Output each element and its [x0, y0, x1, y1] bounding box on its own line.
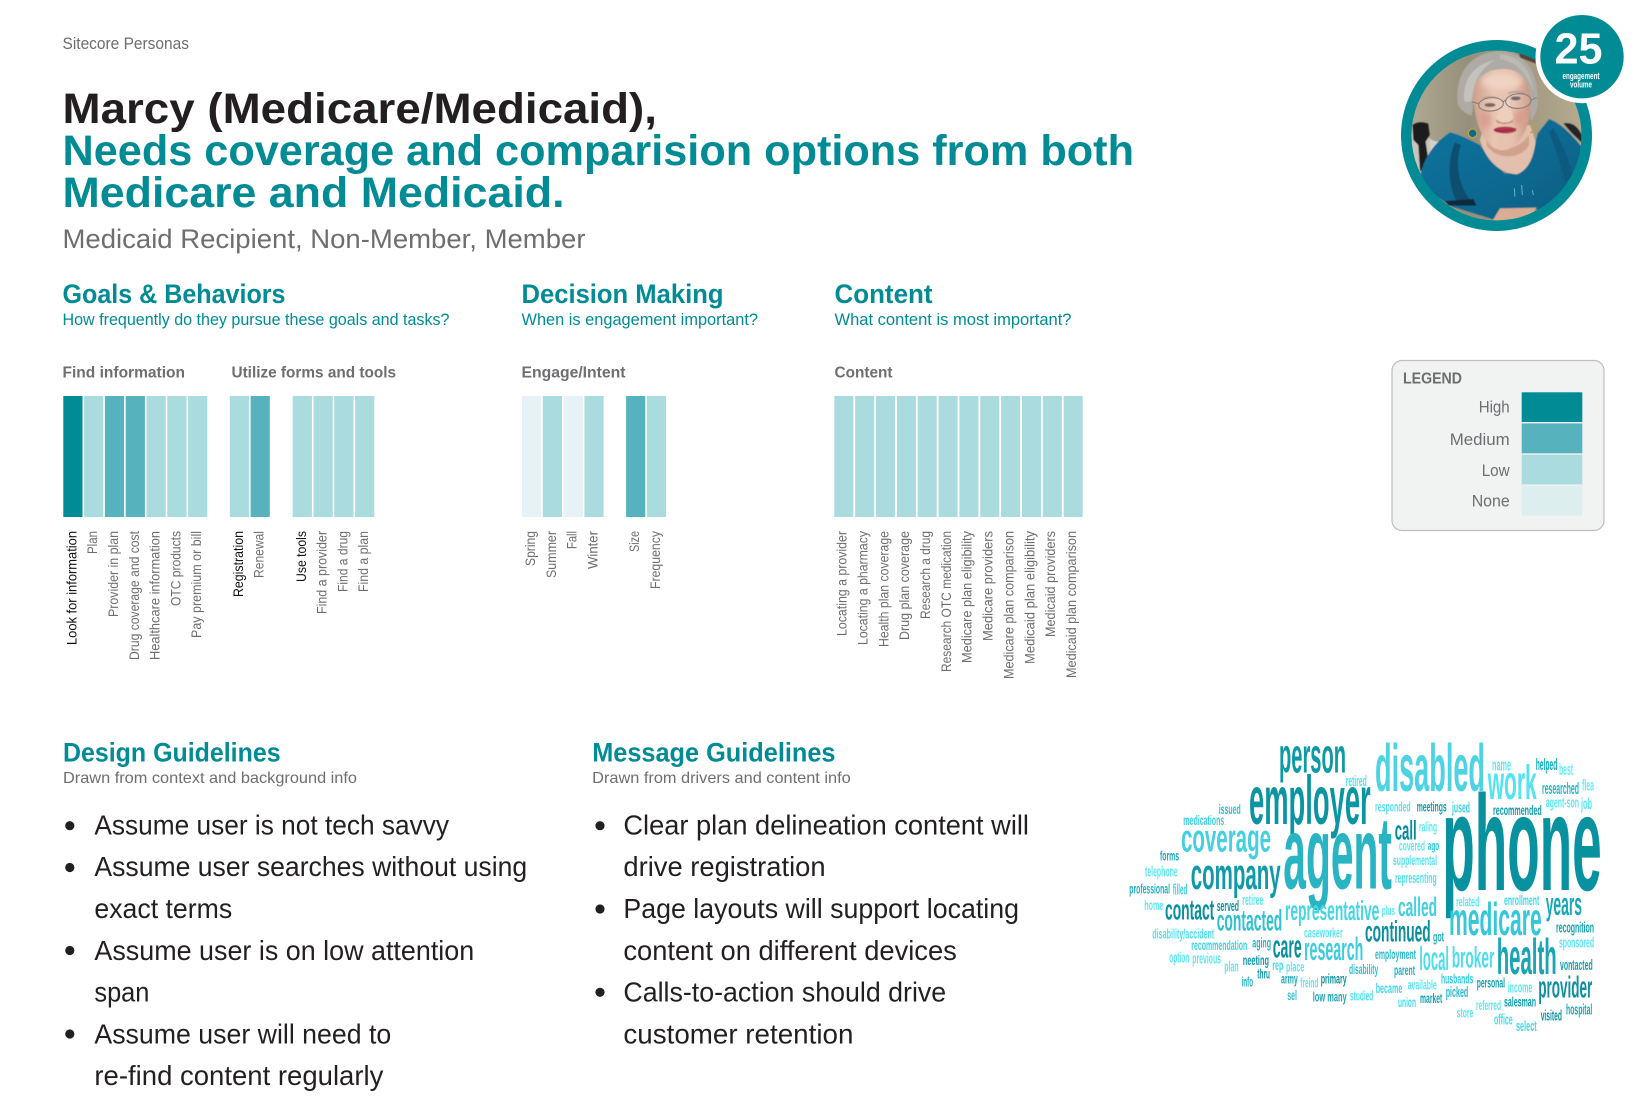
word cloud: issued [1219, 801, 1241, 817]
axis labels: engage intent: Winter [586, 531, 600, 569]
group label: find information: Find information [62, 364, 185, 382]
word cloud: raling [1419, 819, 1437, 835]
legend title: LEGEND [1403, 370, 1462, 387]
word cloud: helped [1536, 755, 1557, 774]
word cloud: representing [1395, 870, 1437, 887]
word cloud: union [1398, 994, 1416, 1010]
word cloud: option [1169, 949, 1189, 966]
word cloud: visited [1541, 1008, 1562, 1025]
word cloud: research [1304, 931, 1363, 967]
bars: use tools [293, 396, 374, 517]
word cloud: name [1492, 756, 1511, 775]
word cloud: available [1408, 976, 1437, 992]
word cloud: medications [1183, 812, 1224, 828]
word cloud: local [1419, 940, 1449, 977]
word cloud: parent [1394, 962, 1415, 978]
word cloud: store [1457, 1005, 1473, 1021]
bullets: design: re-find content regularly [94, 1060, 384, 1091]
word cloud: home [1144, 897, 1163, 913]
legend row: none: None [1472, 492, 1510, 511]
persona photo [1401, 40, 1592, 231]
axis labels: content: Research a drug [918, 531, 933, 619]
axis labels: engage intent: Frequency [648, 531, 663, 589]
word cloud: hospital [1566, 1001, 1592, 1018]
bullets: message: Page layouts will support locating [623, 893, 1019, 924]
word cloud: plan [1224, 959, 1239, 976]
axis labels: goals: OTC products [168, 531, 183, 606]
bullets: design: span [94, 977, 149, 1008]
word cloud: neeting [1243, 952, 1269, 968]
heading: design guidelines: Design Guidelines [63, 738, 281, 768]
word cloud: army [1281, 970, 1298, 986]
title: Medicare and Medicaid. [62, 169, 564, 217]
word cloud: medicare [1449, 893, 1542, 945]
group label: utilize forms and tools: Utilize forms and tools [232, 364, 396, 382]
word cloud: recommended [1493, 802, 1542, 818]
word cloud: became [1376, 980, 1402, 996]
bullets: design: Assume user will need to [94, 1018, 391, 1049]
word cloud: jused [1452, 799, 1470, 816]
subheading: decision question: When is engagement important? [522, 310, 758, 329]
panel: message guidelines [592, 738, 1029, 1049]
word cloud: covered [1399, 838, 1425, 854]
axis labels: content: Medicaid providers [1043, 531, 1058, 637]
subheading: content question: What content is most important? [834, 310, 1072, 329]
word cloud: researched [1542, 779, 1579, 798]
panel: goals and behaviors [62, 279, 450, 660]
word cloud: retiree [1242, 892, 1263, 909]
word cloud: primary [1321, 970, 1347, 986]
word cloud: ago [1428, 838, 1439, 853]
word cloud: recognition [1556, 919, 1594, 936]
word cloud: salesman [1504, 994, 1536, 1010]
heading: content: Content [834, 279, 933, 309]
word cloud: picked [1446, 984, 1468, 1001]
word cloud: previous [1192, 950, 1221, 967]
word cloud: employer [1249, 762, 1371, 839]
engagement caption: engagement [1562, 71, 1600, 81]
word cloud: referred [1476, 997, 1501, 1013]
word cloud: income [1508, 980, 1532, 997]
axis labels: goals: Find a provider [315, 531, 330, 614]
axis labels: content: Medicare plan eligibility [960, 531, 975, 663]
word cloud: disability/accident [1152, 925, 1214, 941]
subheading: goals question: How frequently do they pursue these goals and tasks? [62, 310, 450, 329]
word cloud: meetings [1417, 799, 1447, 815]
word cloud: studied [1350, 988, 1373, 1004]
axis labels: goals: Healthcare information [148, 531, 163, 660]
word cloud: disability [1349, 961, 1378, 977]
word cloud: select [1516, 1018, 1537, 1035]
bullets: design: exact terms [94, 893, 232, 924]
eyebrow label: Sitecore Personas [62, 35, 189, 53]
word cloud [1129, 729, 1602, 1035]
title: Marcy (Medicare/Medicaid), [62, 85, 657, 133]
heading: decision making: Decision Making [522, 279, 724, 309]
bars: content [834, 396, 1083, 517]
persona subtitle: Medicaid Recipient, Non-Member, Member [62, 224, 586, 254]
axis labels: content: Locating a pharmacy [856, 531, 870, 645]
word cloud: health [1497, 929, 1557, 985]
word cloud: telephone [1145, 864, 1178, 881]
word cloud: call [1395, 815, 1417, 845]
legend row: medium: Medium [1450, 430, 1510, 449]
bullets: message: customer retention [623, 1018, 853, 1049]
axis labels: content: Drug plan coverage [897, 531, 912, 640]
legend row: high [1479, 392, 1582, 422]
word cloud: caseworker [1304, 924, 1343, 940]
legend row: low: Low [1482, 461, 1510, 480]
word cloud: forms [1160, 848, 1179, 864]
axis labels: engage intent: Summer [544, 531, 559, 578]
axis labels: goals: Find a drug [335, 531, 350, 592]
word cloud: husbands [1441, 970, 1473, 986]
word cloud: related [1456, 894, 1479, 910]
word cloud: broker [1452, 942, 1494, 975]
axis labels: content: Medicare providers [981, 531, 996, 641]
axis labels: goals: Find a plan [356, 531, 371, 592]
word cloud: called [1398, 892, 1437, 922]
title: Needs coverage and comparision options from both [62, 127, 1134, 175]
axis labels: goals: Provider in plan [106, 531, 121, 617]
bullets: message: content on different devices [623, 935, 957, 966]
legend row: none [1472, 486, 1582, 516]
panel: design guidelines [63, 738, 527, 1091]
word cloud: contact [1165, 894, 1214, 926]
axis labels: content: Research OTC medication [939, 531, 954, 672]
word cloud: contacted [1217, 905, 1282, 938]
word cloud: coverage [1181, 818, 1271, 861]
subheading: message source: Drawn from drivers and content info [592, 770, 851, 787]
heading: message guidelines: Message Guidelines [592, 738, 836, 768]
portrait illustration [1412, 50, 1582, 220]
group label: content: Content [834, 364, 893, 382]
bullets: message: Clear plan delineation content will [623, 809, 1029, 840]
word cloud: person [1279, 729, 1346, 783]
word cloud: supplemental [1393, 852, 1437, 868]
legend row: medium [1450, 423, 1582, 453]
word cloud: thru [1257, 965, 1270, 981]
axis labels: engage intent: Spring [523, 531, 538, 566]
bars: engage intent [522, 396, 666, 517]
axis labels: content: Health plan coverage [876, 531, 891, 647]
heading: goals and behaviors: Goals & Behaviors [62, 279, 286, 309]
word cloud: sponsored [1559, 934, 1594, 951]
legend row: high: High [1479, 398, 1510, 417]
word cloud: recommendation [1191, 937, 1247, 953]
bullets: message [595, 809, 1029, 1049]
word cloud: filled [1173, 881, 1187, 898]
word cloud: continued [1365, 916, 1431, 949]
word cloud: care [1273, 928, 1302, 964]
word cloud: job [1581, 796, 1592, 813]
word cloud: low many [1313, 989, 1347, 1005]
bullets: message: drive registration [623, 851, 826, 882]
engagement number: 25 [1554, 24, 1602, 74]
photo ring [1401, 40, 1592, 231]
axis labels: goals: Drug coverage and cost [127, 531, 142, 660]
word cloud: company [1191, 850, 1281, 899]
axis labels: goals: Registration [231, 531, 246, 597]
axis labels: content: Medicare plan comparison [1001, 531, 1016, 679]
legend row: low [1482, 455, 1582, 484]
bullets: design [65, 809, 527, 1091]
group label: engage intent: Engage/Intent [522, 364, 626, 382]
engagement caption [1562, 71, 1600, 90]
word cloud: freind [1300, 974, 1318, 990]
engagement badge [1536, 10, 1628, 103]
title [62, 85, 1134, 217]
axis labels: goals [64, 531, 371, 660]
badge circle [1540, 15, 1624, 98]
axis labels: goals: Use tools [294, 531, 309, 582]
word cloud: personal [1477, 975, 1505, 991]
word cloud: enrollment [1504, 892, 1539, 908]
word cloud: rep [1272, 957, 1283, 973]
word cloud: agent-son [1546, 795, 1579, 812]
word cloud: aging [1252, 935, 1271, 951]
word cloud: flea [1582, 778, 1594, 795]
word cloud: years [1546, 886, 1582, 922]
axis labels: goals: Renewal [252, 531, 267, 578]
word cloud: retired [1346, 773, 1367, 790]
axis labels: goals: Pay premium or bill [189, 531, 204, 638]
word cloud: employment [1375, 946, 1416, 962]
legend [1392, 360, 1604, 530]
word cloud: professional [1129, 880, 1170, 896]
panel: decision making [522, 279, 758, 589]
word cloud: vontacted [1560, 957, 1593, 974]
bullets: design: Assume user is on low attention [94, 935, 474, 966]
word cloud: work [1487, 757, 1537, 810]
bars: registration and renewal [230, 396, 270, 517]
axis labels: content [834, 531, 1079, 679]
word cloud: best [1559, 760, 1573, 779]
axis labels: engage intent: Fall [565, 531, 580, 549]
axis labels: engage intent: Size [627, 531, 642, 552]
word cloud: responded [1375, 799, 1411, 815]
bars: find information [63, 396, 207, 517]
axis labels: content: Medicaid plan comparison [1064, 531, 1079, 678]
bullets: design: Assume user is not tech savvy [94, 809, 449, 840]
axis labels: content: Locating a provider [834, 531, 850, 636]
word cloud: plus [1382, 903, 1395, 918]
word cloud: representative [1285, 895, 1379, 926]
axis labels: engage intent [523, 531, 663, 589]
bullets: message: Calls-to-action should drive [623, 977, 946, 1008]
bullets: design: Assume user searches without using [94, 851, 527, 882]
axis labels: content: Medicaid plan eligibility [1022, 531, 1037, 664]
subheading: design source: Drawn from context and background info [63, 770, 357, 787]
engagement caption: volume [1570, 80, 1592, 90]
axis labels: goals: Look for information [64, 531, 79, 645]
axis labels: goals: Plan [85, 531, 100, 554]
word cloud: disabled [1375, 731, 1485, 806]
word cloud: info [1242, 974, 1253, 990]
word cloud: got [1433, 929, 1444, 945]
panel: content [834, 279, 1083, 679]
word cloud: sel [1287, 987, 1297, 1003]
word cloud: market [1420, 990, 1442, 1006]
badge halo [1536, 10, 1628, 103]
legend box [1392, 360, 1604, 530]
word cloud: served [1217, 898, 1239, 915]
word cloud: office [1494, 1011, 1513, 1028]
word cloud: agent [1283, 795, 1392, 910]
word cloud: place [1286, 959, 1304, 975]
